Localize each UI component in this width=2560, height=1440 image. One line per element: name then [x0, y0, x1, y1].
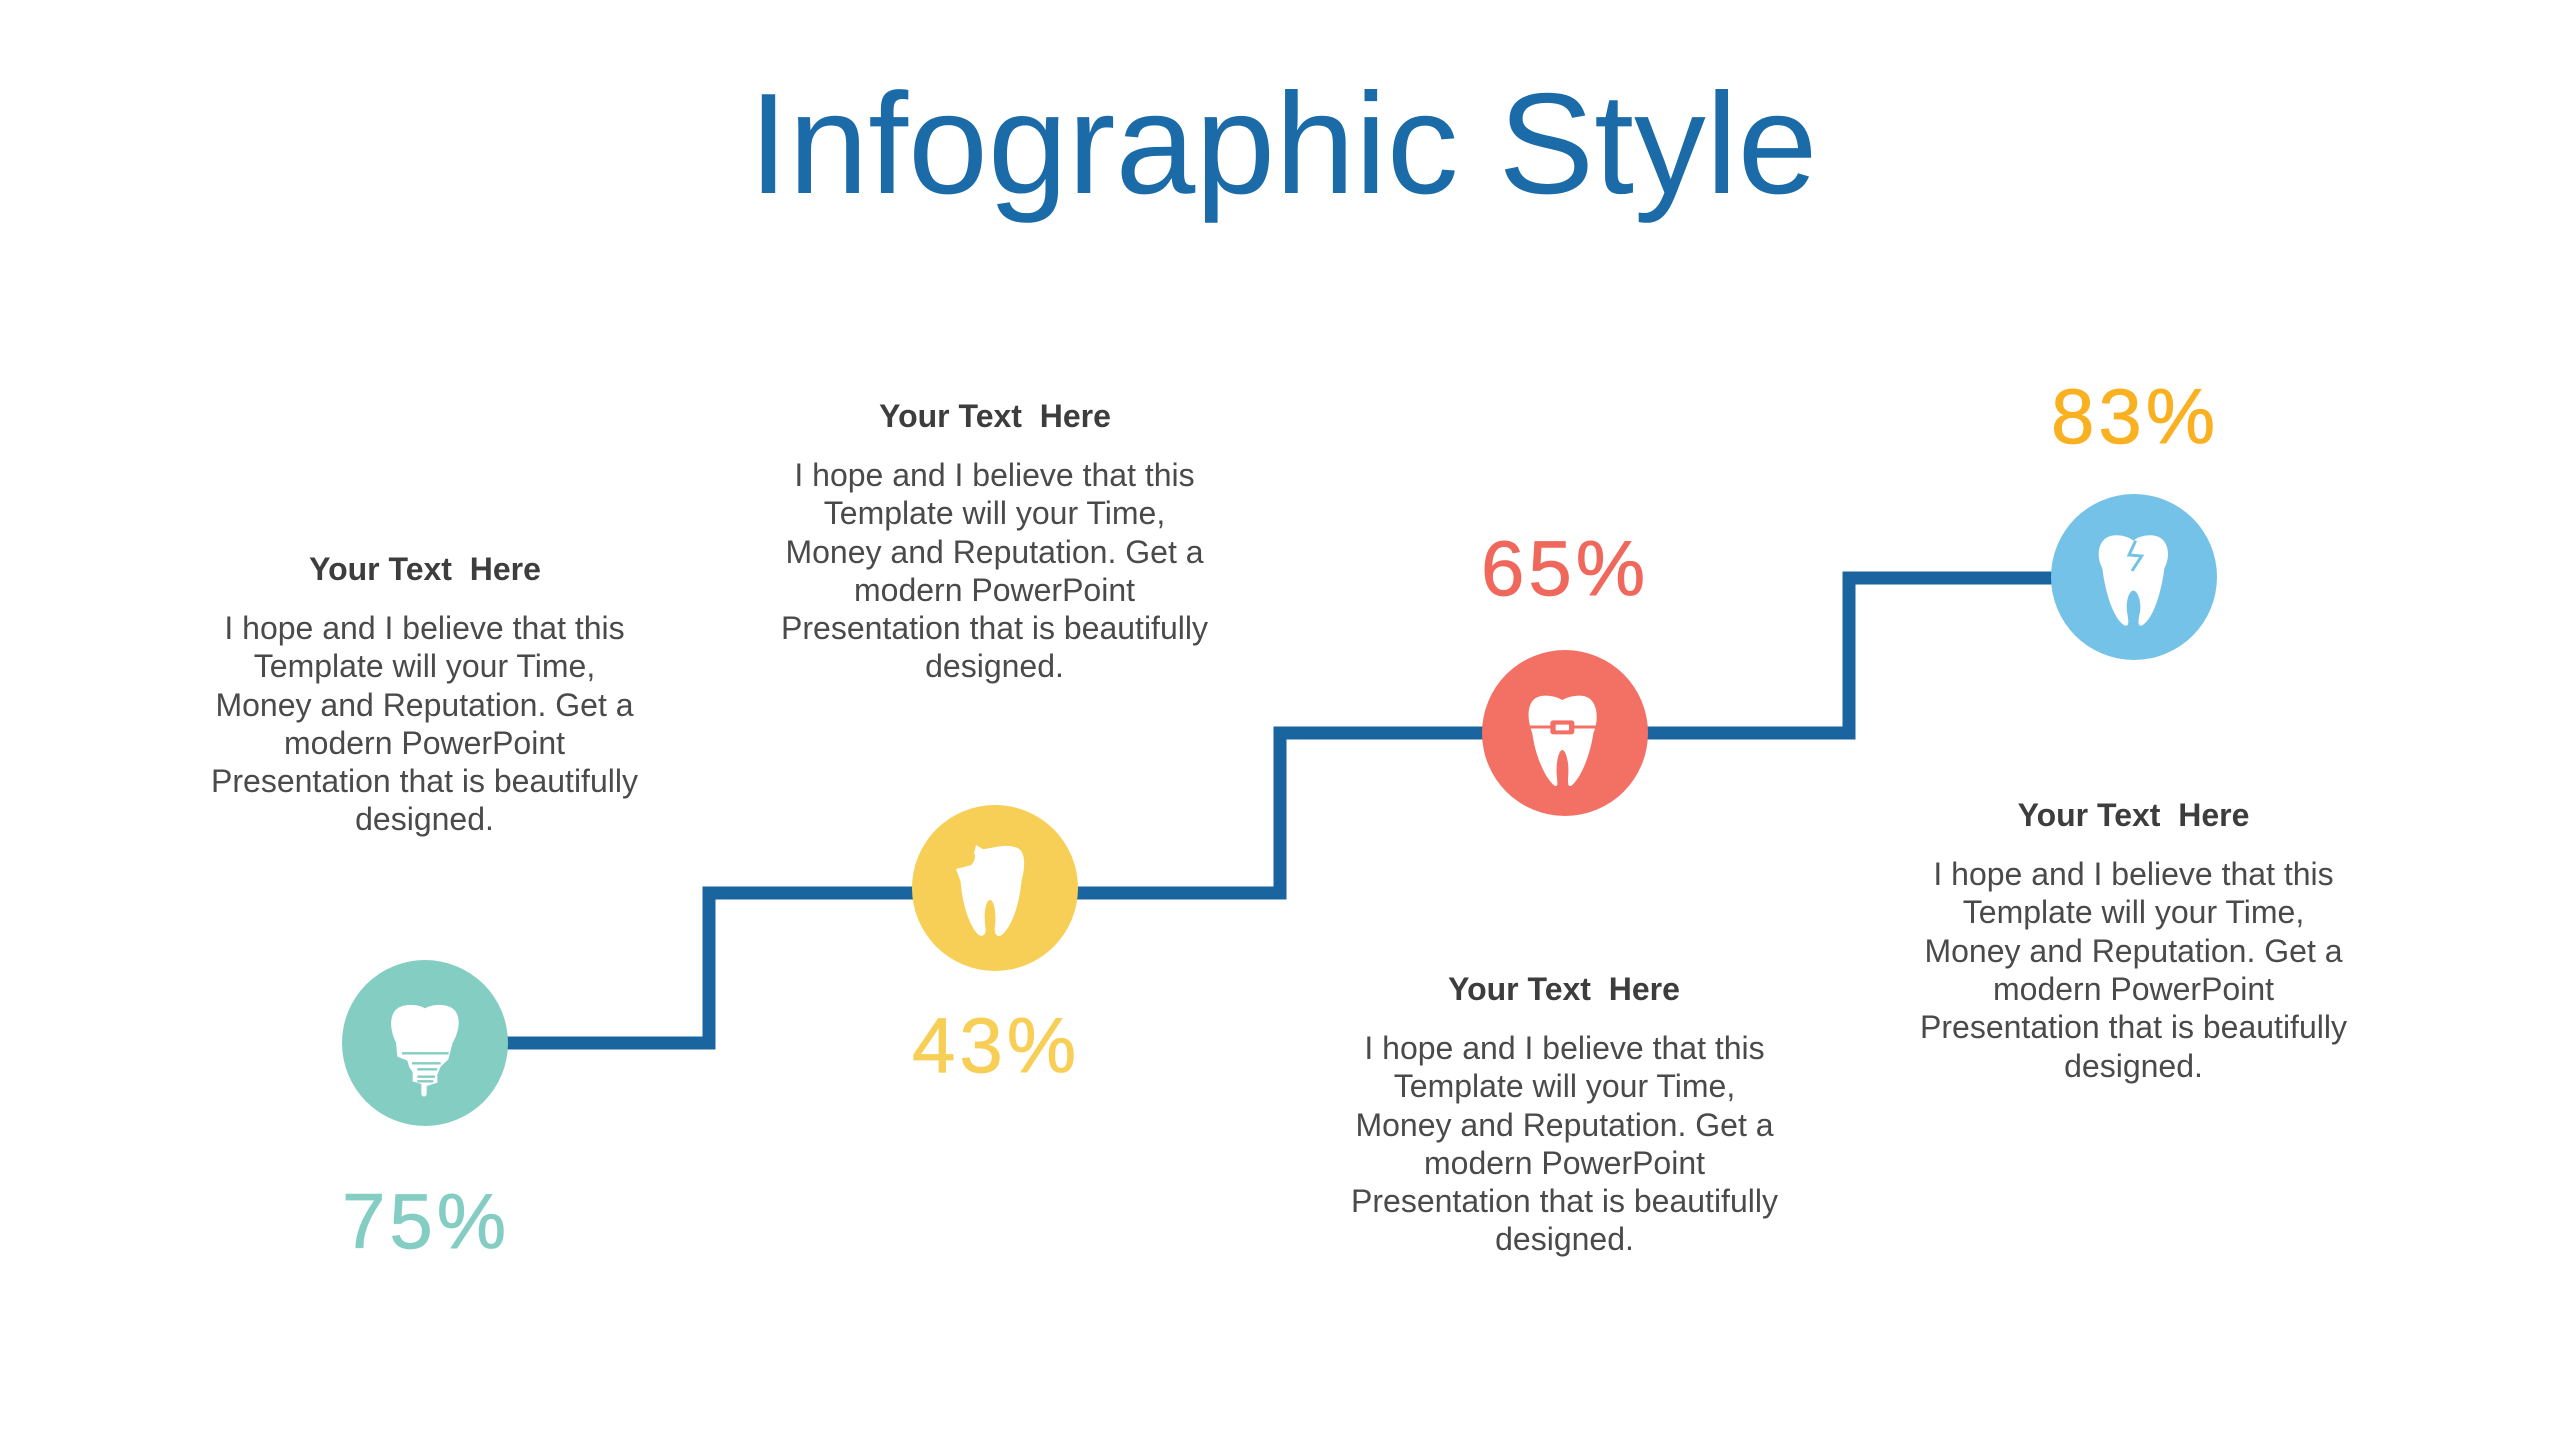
text block: step 4: I hope and I believe that this	[1933, 856, 2334, 892]
text block: step 3: Template will your Time,	[1394, 1068, 1735, 1104]
text block: step 3: modern PowerPoint	[1424, 1145, 1705, 1181]
text block: step 4: Money and Reputation. Get a	[1924, 933, 2343, 969]
step 3 marker	[1482, 650, 1648, 816]
step 2 marker	[912, 805, 1078, 971]
text block: step 2: Presentation that is beautifully	[781, 610, 1208, 646]
percentage: 83%: 83%	[2051, 372, 2219, 460]
text block: step 3: Presentation that is beautifully	[1351, 1183, 1778, 1219]
percentage: 43%: 43%	[912, 1001, 1080, 1089]
circle: teal	[342, 960, 508, 1126]
text block: step 4: Presentation that is beautifully	[1920, 1009, 2347, 1045]
text block: step 1	[211, 551, 638, 837]
text block: step 3	[1351, 971, 1778, 1257]
text block: step 4: modern PowerPoint	[1993, 971, 2274, 1007]
text block: step 4: designed.	[2064, 1048, 2203, 1084]
text block: step 3: Your Text Here	[1448, 971, 1680, 1007]
text block: step 2: designed.	[925, 648, 1064, 684]
title: Infographic Style	[749, 64, 1817, 224]
icon: tooth with braces	[1529, 696, 1597, 786]
icon: cracked tooth	[2099, 535, 2168, 626]
percentage: 65%: 65%	[1481, 524, 1649, 612]
step 4 marker	[2051, 494, 2217, 660]
text block: step 1: Your Text Here	[309, 551, 541, 587]
circle: coral	[1482, 650, 1648, 816]
text block: step 2: I hope and I believe that this	[794, 457, 1195, 493]
text block: step 4: Your Text Here	[2018, 797, 2249, 833]
text block: step 2: Money and Reputation. Get a	[785, 534, 1204, 570]
text block: step 4: Template will your Time,	[1963, 894, 2304, 930]
circle: yellow	[912, 805, 1078, 971]
stepped connector line	[500, 578, 2060, 1043]
step 1 marker	[342, 960, 508, 1126]
text block: step 1: modern PowerPoint	[284, 725, 565, 761]
text block: step 2: Template will your Time,	[824, 495, 1165, 531]
text block: step 2	[781, 398, 1208, 684]
text block: step 1: Money and Reputation. Get a	[215, 687, 634, 723]
text block: step 2: Your Text Here	[879, 398, 1111, 434]
text block: step 1: I hope and I believe that this	[224, 610, 625, 646]
text block: step 1: designed.	[355, 801, 494, 837]
text block: step 3: I hope and I believe that this	[1364, 1030, 1765, 1066]
text block: step 1: Template will your Time,	[254, 648, 595, 684]
text block: step 3: designed.	[1495, 1221, 1634, 1257]
text block: step 4	[1920, 797, 2347, 1084]
circle: blue	[2051, 494, 2217, 660]
text block: step 2: modern PowerPoint	[854, 572, 1135, 608]
text block: step 1: Presentation that is beautifully	[211, 763, 638, 799]
percentage: 75%: 75%	[342, 1177, 510, 1265]
icon: dental implant	[391, 1005, 459, 1096]
icon: chipped tooth	[956, 845, 1024, 936]
text block: step 3: Money and Reputation. Get a	[1355, 1107, 1774, 1143]
